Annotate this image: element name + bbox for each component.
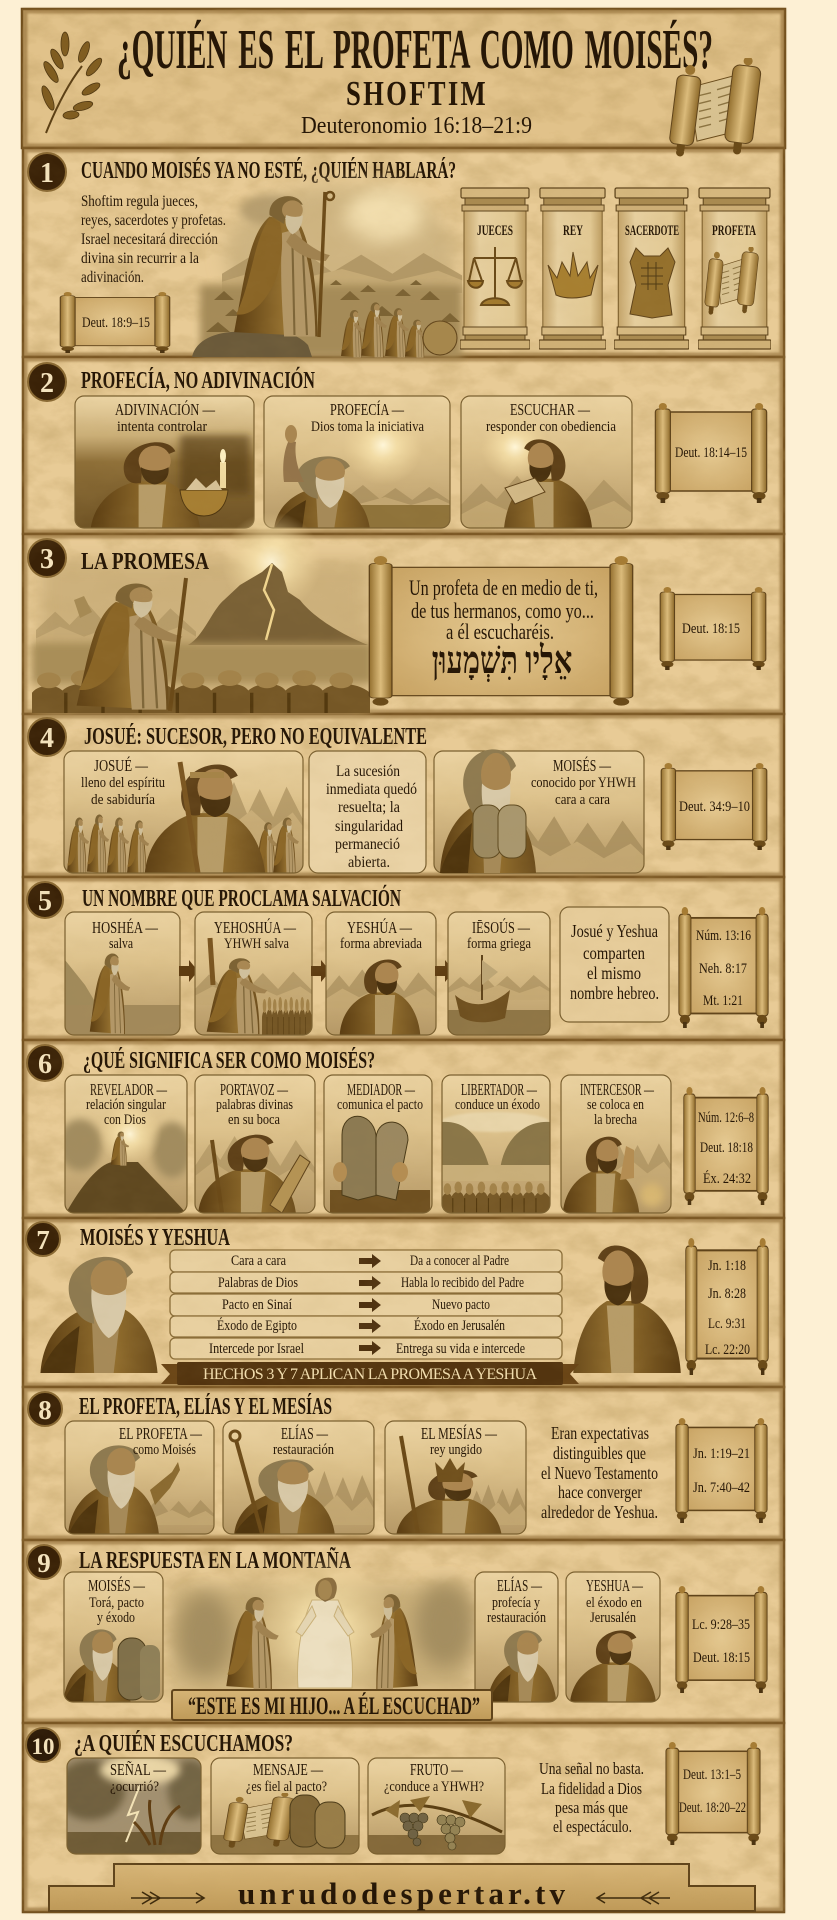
icon: priestly vest	[630, 248, 675, 318]
text card: Josué y Yeshua	[571, 921, 658, 941]
scripture scroll	[684, 1087, 768, 1205]
text block: distinguibles que	[553, 1443, 646, 1463]
card: revelador: con Dios	[104, 1112, 146, 1128]
badge 6: 6	[38, 1049, 52, 1080]
text block: alrededor de Yeshua.	[541, 1502, 658, 1522]
card: moisés: Torá, pacto	[89, 1595, 144, 1611]
arrows right	[597, 1892, 670, 1904]
panel: section 10	[26, 1728, 760, 1911]
heading: EL PROFETA, ELÍAS Y EL MESÍAS	[79, 1394, 332, 1420]
card: libertador: conduce un éxodo	[455, 1097, 540, 1113]
comparison table: Cara a cara	[231, 1253, 286, 1269]
promise scroll: de tus hermanos, como yo...	[411, 598, 594, 623]
badge 2: 2	[40, 368, 54, 399]
banner: hechos: HECHOS 3 Y 7 APLICAN LA PROMESA A YESHUA	[203, 1366, 537, 1383]
pillar: jueces: JUECES	[477, 223, 513, 239]
website: unrudodespertar.tv	[238, 1876, 566, 1911]
comparison table: Entrega su vida e intercede	[396, 1341, 525, 1357]
badge 6	[27, 1045, 63, 1081]
card: iēsoús	[448, 912, 550, 1035]
card: adivinación: ADIVINACIÓN —	[115, 400, 215, 419]
card: yehoshúa: YEHOSHÚA —	[214, 918, 296, 937]
illustration: Sinai and the people	[32, 512, 372, 713]
scripture scroll: Lc. 9:28–35	[692, 1617, 750, 1633]
card: escuchar	[461, 396, 632, 530]
text block: Una señal no basta.	[539, 1759, 644, 1778]
card: escuchar: responder con obediencia	[486, 419, 616, 435]
card: portavoz: palabras divinas	[216, 1097, 293, 1113]
badge 4: 4	[40, 723, 54, 754]
text block	[539, 1759, 644, 1836]
comparison table: Intercede por Israel	[209, 1341, 304, 1357]
text card: sucesión: resuelta; la	[338, 799, 400, 816]
card: intercesor: INTERCESOR —	[580, 1080, 654, 1099]
header panel background	[22, 9, 785, 148]
card: josué: lleno del espíritu	[81, 775, 165, 791]
pillar: sacerdote: SACERDOTE	[625, 223, 679, 239]
scripture scroll: Jn. 7:40–42	[693, 1480, 750, 1496]
illustration: Moses over the camp	[192, 185, 462, 358]
text block: el espectáculo.	[553, 1817, 632, 1836]
scripture scroll: Deut. 18:15	[693, 1650, 750, 1666]
portrait: Moses	[40, 1257, 158, 1373]
heading: UN NOMBRE QUE PROCLAMA SALVACIÓN	[82, 885, 401, 912]
text block: hace converger	[558, 1482, 642, 1502]
panel: section 2	[28, 363, 767, 532]
scripture scroll: Deut. 18:18	[700, 1140, 753, 1156]
card: portavoz	[195, 1075, 315, 1214]
card: moisés	[63, 1572, 163, 1703]
card: moisés: y éxodo	[97, 1610, 135, 1626]
promise scroll	[369, 556, 633, 706]
pillar: rey	[539, 188, 606, 349]
heading: PROFECÍA, NO ADIVINACIÓN	[81, 367, 315, 394]
body text: reyes, sacerdotes y profetas.	[81, 212, 226, 229]
card: portavoz: en su boca	[228, 1112, 280, 1128]
banner: este es mi hijo: “ESTE ES MI HIJO... A ÉL ESCUCHAD”	[188, 1692, 480, 1720]
scripture scroll: Mt. 1:21	[703, 993, 743, 1009]
badge 7: 7	[36, 1225, 50, 1255]
scripture scroll	[686, 1238, 768, 1375]
text block	[541, 1423, 658, 1522]
card: intercesor: la brecha	[594, 1112, 637, 1128]
badge 3: 3	[40, 544, 54, 575]
badge 5: 5	[38, 886, 52, 917]
footer banner	[49, 1864, 755, 1911]
card: el mesías: rey ungido	[430, 1442, 482, 1458]
arrow	[311, 960, 330, 982]
card: revelador	[58, 1075, 192, 1213]
text card: sucesión: inmediata quedó	[326, 781, 417, 798]
card: portavoz: PORTAVOZ —	[220, 1080, 288, 1099]
card: intercesor	[561, 1075, 672, 1215]
text card: sucesión: singularidad	[335, 818, 403, 835]
text card: sucesión: permaneció	[335, 836, 400, 853]
card: mensaje	[211, 1758, 359, 1854]
badge 9	[27, 1545, 61, 1579]
card: yeshua: el éxodo en	[586, 1595, 643, 1611]
scripture scroll	[676, 1418, 767, 1523]
text card	[560, 907, 669, 1022]
panel: section 4	[28, 718, 767, 876]
card: josué: JOSUÉ —	[94, 756, 148, 775]
card: mediador: MEDIADOR —	[347, 1080, 415, 1099]
scripture scroll: Jn. 1:18	[708, 1258, 746, 1274]
badge 3	[28, 539, 66, 577]
badge 1: 1	[40, 158, 54, 189]
panel: section 5	[27, 882, 768, 1035]
scripture scroll	[60, 292, 170, 353]
badge 4	[28, 718, 66, 756]
card: yeshúa: forma abreviada	[340, 936, 422, 952]
scripture scroll	[679, 907, 768, 1028]
scripture scroll	[666, 1742, 760, 1845]
card: el mesías: EL MESÍAS —	[421, 1424, 497, 1443]
card: mediador: comunica el pacto	[337, 1097, 423, 1113]
card: hoshéa	[65, 912, 180, 1035]
card: intercesor: se coloca en	[587, 1097, 645, 1113]
card: elías: ELÍAS —	[281, 1424, 328, 1443]
scripture scroll	[676, 1586, 767, 1693]
comparison table: Éxodo en Jerusalén	[414, 1317, 506, 1334]
pillar: profeta	[698, 188, 771, 349]
text card: comparten	[583, 943, 645, 963]
card: elías: restauración	[273, 1442, 335, 1458]
text card: el mismo	[587, 963, 641, 983]
scripture reference: Deuteronomio 16:18–21:9	[301, 113, 532, 139]
arrow	[179, 960, 198, 982]
subtitle: SHOFTIM	[346, 74, 488, 113]
heading: LA RESPUESTA EN LA MONTAÑA	[79, 1548, 351, 1574]
badge 9: 9	[37, 1548, 51, 1578]
arrows left	[131, 1892, 204, 1904]
card: moisés: MOISÉS —	[88, 1576, 145, 1595]
scripture scroll: Lc. 22:20	[705, 1342, 750, 1358]
badge 7	[26, 1222, 60, 1256]
badge 10	[26, 1728, 60, 1762]
card: el profeta: como Moisés	[133, 1442, 196, 1458]
badge 2	[28, 363, 66, 401]
heading: ¿QUÉ SIGNIFICA SER COMO MOISÉS?	[83, 1048, 375, 1074]
card: elías: restauración	[487, 1610, 547, 1626]
illustration: transfiguration	[170, 1555, 475, 1705]
card: mediador	[324, 1075, 432, 1215]
scripture scroll: Jn. 8:28	[708, 1286, 746, 1302]
card: mensaje: ¿es fiel al pacto?	[246, 1779, 327, 1795]
arrow	[435, 960, 454, 982]
panel: section 3	[28, 512, 766, 713]
heading: ¿A QUIÉN ESCUCHAMOS?	[74, 1731, 293, 1757]
card: yehoshúa: YHWH salva	[224, 936, 289, 952]
card: josué	[64, 751, 303, 876]
card: yehoshúa	[195, 912, 312, 1035]
card: yeshua: YESHUA —	[586, 1576, 643, 1595]
panel: section 8	[28, 1392, 767, 1536]
card: revelador: relación singular	[86, 1097, 166, 1113]
card: elías: ELÍAS —	[497, 1576, 542, 1595]
scripture scroll: Núm. 13:16	[696, 928, 751, 944]
body text: divina sin recurrir a la	[81, 250, 199, 267]
card: hoshéa: HOSHÉA —	[92, 918, 158, 937]
card: adivinación: intenta controlar	[117, 419, 207, 435]
card: moisés: conocido por YHWH	[531, 775, 636, 791]
card: yeshua: Jerusalén	[590, 1610, 637, 1626]
comparison table	[170, 1250, 562, 1359]
card: fruto	[368, 1758, 505, 1854]
card: yeshua	[566, 1572, 660, 1704]
scripture scroll: Éx. 24:32	[703, 1170, 751, 1187]
scripture scroll: Deut. 18:20–22	[679, 1800, 746, 1816]
text block: La fidelidad a Dios	[541, 1779, 642, 1798]
card: yeshúa	[326, 912, 436, 1035]
text block: el Nuevo Testamento	[541, 1463, 658, 1483]
banner: este es mi hijo	[172, 1690, 492, 1720]
text card: nombre hebreo.	[570, 983, 659, 1003]
card: el profeta: EL PROFETA —	[119, 1424, 202, 1443]
panel: section 7	[26, 1222, 768, 1385]
card: adivinación	[75, 396, 254, 532]
text block: Eran expectativas	[551, 1423, 649, 1443]
card: fruto: ¿conduce a YHWH?	[384, 1779, 484, 1795]
body text: Israel necesitará dirección	[81, 231, 218, 248]
card: moisés: cara a cara	[555, 792, 610, 808]
portrait: Yeshua	[573, 1245, 681, 1373]
body text: Shoftim regula jueces,	[81, 193, 198, 210]
card: el mesías	[385, 1421, 526, 1536]
card: moisés: MOISÉS —	[553, 756, 611, 775]
badge 1	[28, 153, 66, 191]
heading: LA PROMESA	[81, 549, 210, 575]
card: moisés	[434, 749, 644, 873]
card: elías: profecía y	[492, 1595, 541, 1611]
card: el profeta	[65, 1421, 214, 1536]
card: señal	[55, 1755, 212, 1854]
icon: torah scroll	[668, 55, 763, 158]
banner: hechos	[161, 1362, 579, 1385]
scripture scroll: Lc. 9:31	[708, 1316, 746, 1332]
pillar: profeta: PROFETA	[712, 223, 756, 239]
scripture scroll: Deut. 13:1–5	[683, 1767, 741, 1783]
header	[39, 19, 763, 158]
promise scroll: Un profeta de en medio de ti,	[409, 575, 598, 600]
icon: olive branch	[39, 32, 104, 133]
scripture scroll: Jn. 1:19–21	[693, 1446, 750, 1462]
scripture scroll: Deut. 18:15	[682, 621, 740, 637]
promise scroll: a él escucharéis.	[446, 619, 554, 644]
badge 5	[27, 882, 63, 918]
hebrew text: אֵלָיו תִּשְׁמָעוּן	[432, 640, 572, 682]
badge 10: 10	[32, 1734, 54, 1759]
scripture scroll: Neh. 8:17	[699, 961, 747, 977]
card: fruto: FRUTO —	[410, 1760, 463, 1779]
body text	[81, 193, 226, 286]
comparison table: Palabras de Dios	[218, 1275, 298, 1291]
icon: scroll	[704, 245, 760, 316]
scripture scroll: Deut. 34:9–10	[679, 799, 750, 815]
scripture scroll	[655, 403, 767, 503]
comparison table: Éxodo de Egipto	[217, 1317, 297, 1334]
scripture scroll: Deut. 18:14–15	[675, 445, 747, 461]
card: hoshéa: salva	[109, 936, 133, 952]
card: josué: de sabiduría	[91, 792, 156, 808]
heading: MOISÉS Y YESHUA	[80, 1225, 230, 1251]
comparison table: Pacto en Sinaí	[222, 1297, 292, 1313]
card: profecía: PROFECÍA —	[330, 400, 404, 419]
body text: adivinación.	[81, 269, 144, 286]
card: libertador: LIBERTADOR —	[461, 1080, 537, 1099]
comparison table: Nuevo pacto	[432, 1297, 490, 1313]
card: profecía	[264, 396, 450, 530]
heading: JOSUÉ: SUCESOR, PERO NO EQUIVALENTE	[84, 724, 427, 750]
scripture scroll	[661, 763, 767, 850]
panel: section 9	[27, 1545, 767, 1720]
pillar: jueces	[460, 188, 530, 349]
comparison table: Da a conocer al Padre	[410, 1253, 509, 1269]
card: profecía: Dios toma la iniciativa	[311, 419, 424, 435]
scripture scroll: Deut. 18:9–15	[82, 315, 150, 331]
icon: crown	[548, 252, 598, 298]
comparison table: Habla lo recibido del Padre	[401, 1275, 524, 1291]
card: elías	[223, 1421, 374, 1535]
pillar: rey: REY	[563, 223, 583, 239]
panel: section 6	[27, 1045, 768, 1215]
badge 8	[28, 1392, 62, 1426]
card: iēsoús: forma griega	[467, 936, 531, 952]
card: elías	[475, 1572, 558, 1704]
card: iēsoús: IĒSOÚS —	[472, 918, 530, 937]
heading: CUANDO MOISÉS YA NO ESTÉ, ¿QUIÉN HABLARÁ?	[81, 158, 456, 184]
card: señal: SEÑAL —	[110, 1760, 166, 1779]
text card: sucesión	[309, 751, 426, 873]
card: yeshúa: YESHÚA —	[347, 918, 412, 937]
text block: pesa más que	[555, 1798, 628, 1817]
card: mensaje: MENSAJE —	[253, 1760, 323, 1779]
icon: scales	[468, 247, 522, 305]
scripture scroll	[660, 587, 766, 670]
card: escuchar: ESCUCHAR —	[510, 400, 590, 419]
text card: sucesión: La sucesión	[336, 763, 400, 780]
badge 8: 8	[38, 1395, 52, 1425]
card: libertador	[441, 1075, 550, 1213]
card: señal: ¿ocurrió?	[110, 1779, 159, 1795]
card: revelador: REVELADOR —	[90, 1080, 167, 1099]
panel: section 1	[28, 153, 771, 358]
pillar: sacerdote	[614, 188, 689, 349]
scripture scroll: Núm. 12:6–8	[698, 1110, 754, 1126]
text card: sucesión: abierta.	[348, 854, 390, 871]
